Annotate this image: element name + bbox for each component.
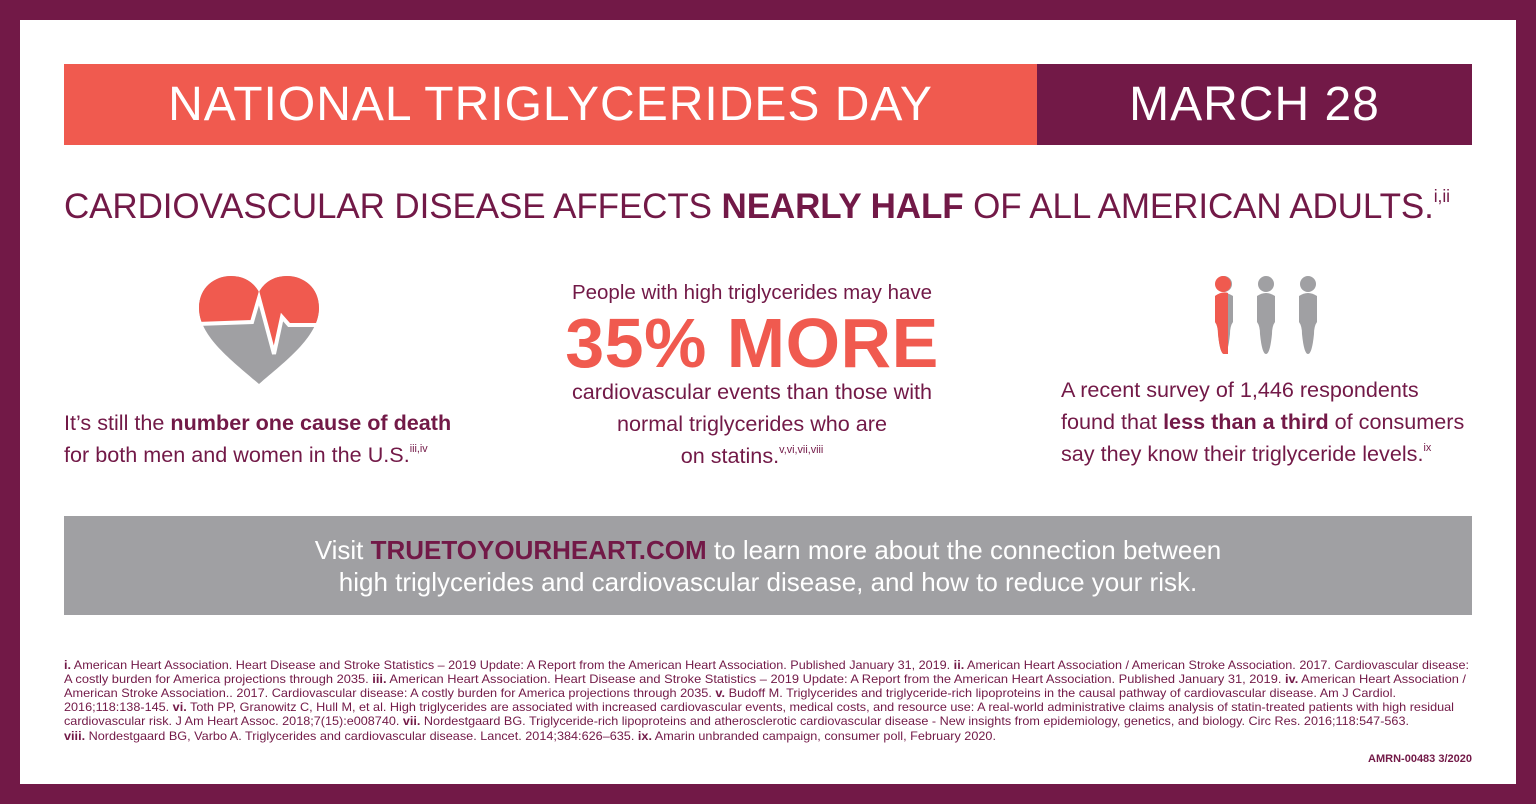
footnotes	[64, 658, 1469, 743]
callout: visit: Visit TRUETOYOURHEART.COM to learn more about the connection between	[315, 535, 1221, 565]
title: NATIONAL TRIGLYCERIDES DAY	[168, 78, 933, 131]
footnotes: A costly burden for America projections through 2035. iii. American Heart Association. Heart Disease and Stroke Statistics – 2019 Update: A Report from the American Heart Association. Published January 31, 2019. iv. American Heart Association /	[64, 672, 1467, 686]
text: survey: A recent survey of 1,446 respondents	[1061, 377, 1419, 402]
footnotes: American Stroke Association.. 2017. Cardiovascular disease: A costly burden for America projections through 2035. v. Budoff M. Triglycerides and triglyceride-rich lipoproteins in the causal pathway of cardiovascular disease. Am J Cardiol.	[64, 686, 1396, 700]
callout: visit	[64, 516, 1472, 615]
footnotes: 2016;118:138-145. vi. Toth PP, Granowitz C, Hull M, et al. High triglycerides are associated with increased cardiovascular events, medical costs, and resource use: A real-world administrative claims analysis of statin-treated patients with high residual	[64, 700, 1454, 714]
headline: CARDIOVASCULAR DISEASE AFFECTS NEARLY HALF OF ALL AMERICAN ADULTS.i,ii	[64, 186, 1450, 226]
text: survey: found that less than a third of consumers	[1061, 409, 1464, 434]
stat: 35% more: cardiovascular events than those with	[572, 379, 932, 404]
icon: heart	[199, 276, 319, 384]
title	[64, 64, 1037, 145]
stat: 35% more: People with high triglycerides may have	[572, 281, 932, 304]
header banner	[64, 64, 1472, 145]
text: number one cause	[64, 410, 451, 467]
date	[1037, 64, 1472, 145]
text: number one cause: for both men and women in the U.S.iii,iv	[64, 442, 428, 467]
stat: 35% more: on statins.v,vi,vii,viii	[681, 443, 823, 468]
stat: 35% more	[565, 281, 939, 468]
text: survey	[1061, 377, 1464, 466]
text: number one cause: It’s still the number one cause of death	[64, 410, 451, 435]
icon: people	[1215, 276, 1317, 354]
text: survey: say they know their triglyceride levels.ix	[1061, 441, 1431, 466]
stat: 35% more: normal triglycerides who are	[617, 411, 887, 436]
code: AMRN: AMRN-00483 3/2020	[1368, 753, 1472, 765]
callout: visit: high triglycerides and cardiovascular disease, and how to reduce your risk.	[339, 567, 1197, 597]
stat: 35% more: 35% MORE	[565, 304, 939, 382]
footnotes: viii. Nordestgaard BG, Varbo A. Triglycerides and cardiovascular disease. Lancet. 2014;384:626–635. ix. Amarin unbranded campaign, consumer poll, February 2020.	[64, 729, 996, 743]
date: MARCH 28	[1129, 78, 1380, 131]
footnotes: cardiovascular risk. J Am Heart Assoc. 2018;7(15):e008740. vii. Nordestgaard BG. Triglyceride-rich lipoproteins and atherosclerotic cardiovascular disease - New insights from epidemiology, genetics, and biology. Circ Res. 2016;118:547-563.	[64, 714, 1409, 728]
footnotes: i. American Heart Association. Heart Disease and Stroke Statistics – 2019 Update: A Report from the American Heart Association. Published January 31, 2019. ii. American Heart Association / American Stroke Association. 2017. Cardiovascular disease:	[64, 658, 1469, 672]
